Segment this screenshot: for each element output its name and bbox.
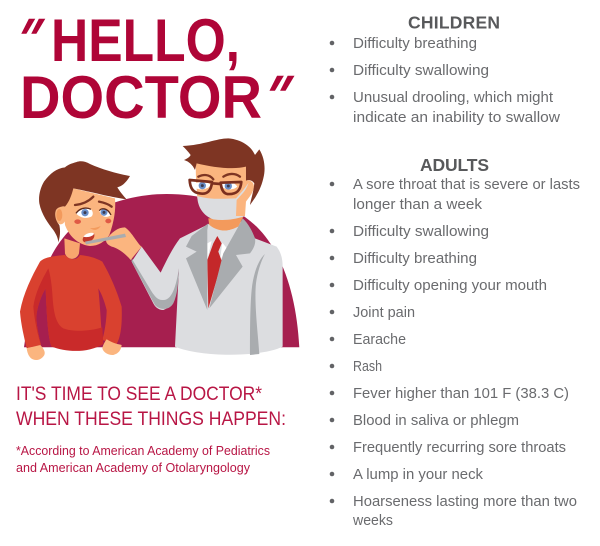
- tie: [207, 236, 222, 308]
- doctor face: [196, 163, 254, 217]
- list: adult symptoms: A lump in your neck: [353, 467, 484, 483]
- boy sweater: [20, 255, 122, 348]
- boy hands: [27, 339, 122, 360]
- list: adult symptoms: Difficulty opening your mouth: [353, 278, 547, 294]
- doctor eyes: [193, 182, 237, 190]
- footnote: [16, 444, 270, 475]
- list: adult symptoms: Fever higher than 101 F (38.3 C): [353, 386, 569, 402]
- title: DOCTOR: [20, 64, 262, 131]
- list: children symptoms: Difficulty breathing: [353, 36, 477, 52]
- doctor: [85, 138, 283, 355]
- call to action heading: WHEN THESE THINGS HAPPEN:: [16, 409, 286, 430]
- list: adult symptoms: A sore throat that is severe or lasts: [353, 177, 580, 193]
- heading: children: CHILDREN: [408, 12, 500, 32]
- boy cheeks: [74, 219, 81, 224]
- list: adult symptoms: Difficulty breathing: [353, 251, 477, 267]
- boy eyes: [75, 197, 112, 218]
- title: [0, 5, 305, 131]
- coat shadows: [132, 258, 179, 309]
- list: adult symptoms: Frequently recurring sore throats: [353, 440, 566, 456]
- list: children symptoms: [330, 36, 561, 126]
- list: adult symptoms: Joint pain: [353, 305, 415, 321]
- doctor hair: [183, 138, 265, 205]
- footnote: and American Academy of Otolaryngology: [16, 461, 251, 475]
- sweater shading: [33, 268, 103, 351]
- shirt: [207, 224, 238, 263]
- list: children symptoms: Difficulty swallowing: [353, 63, 489, 79]
- list: children symptoms: Unusual drooling, which might: [353, 90, 553, 106]
- list: adult symptoms: Rash: [353, 359, 382, 375]
- boy neck: [64, 238, 80, 259]
- list: adult symptoms: Earache: [353, 332, 406, 348]
- list: adult symptoms: Hoarseness lasting more than two: [353, 494, 577, 510]
- title: ": [244, 62, 305, 130]
- boy ear: [55, 206, 66, 224]
- footnote: *According to American Academy of Pediatrics: [16, 444, 270, 458]
- doctor hand with spatula: [106, 227, 142, 260]
- list: adult symptoms: longer than a week: [353, 197, 483, 213]
- lapels: [186, 218, 255, 310]
- list: adult symptoms: [330, 177, 580, 529]
- call to action heading: IT'S TIME TO SEE A DOCTOR*: [16, 384, 263, 405]
- doctor coat and arm: [132, 222, 283, 355]
- boy face: [63, 188, 115, 246]
- title: HELLO,: [51, 7, 240, 74]
- list: adult symptoms: weeks: [352, 513, 393, 529]
- glasses: [190, 180, 241, 194]
- heading: adults: ADULTS: [420, 155, 489, 175]
- boy hair: [39, 161, 130, 242]
- boy nose and mouth: [90, 226, 101, 230]
- boy: [20, 161, 130, 360]
- call to action heading: [16, 384, 286, 430]
- face mask: [197, 183, 249, 220]
- illustration: doctor examining boy: [20, 138, 299, 360]
- list: adult symptoms: Difficulty swallowing: [353, 224, 489, 240]
- list: adult symptoms: Blood in saliva or phlegm: [353, 413, 519, 429]
- doctor neck: [208, 217, 243, 231]
- maroon dome background: [24, 194, 299, 347]
- list: children symptoms: indicate an inability to swallow: [353, 110, 561, 126]
